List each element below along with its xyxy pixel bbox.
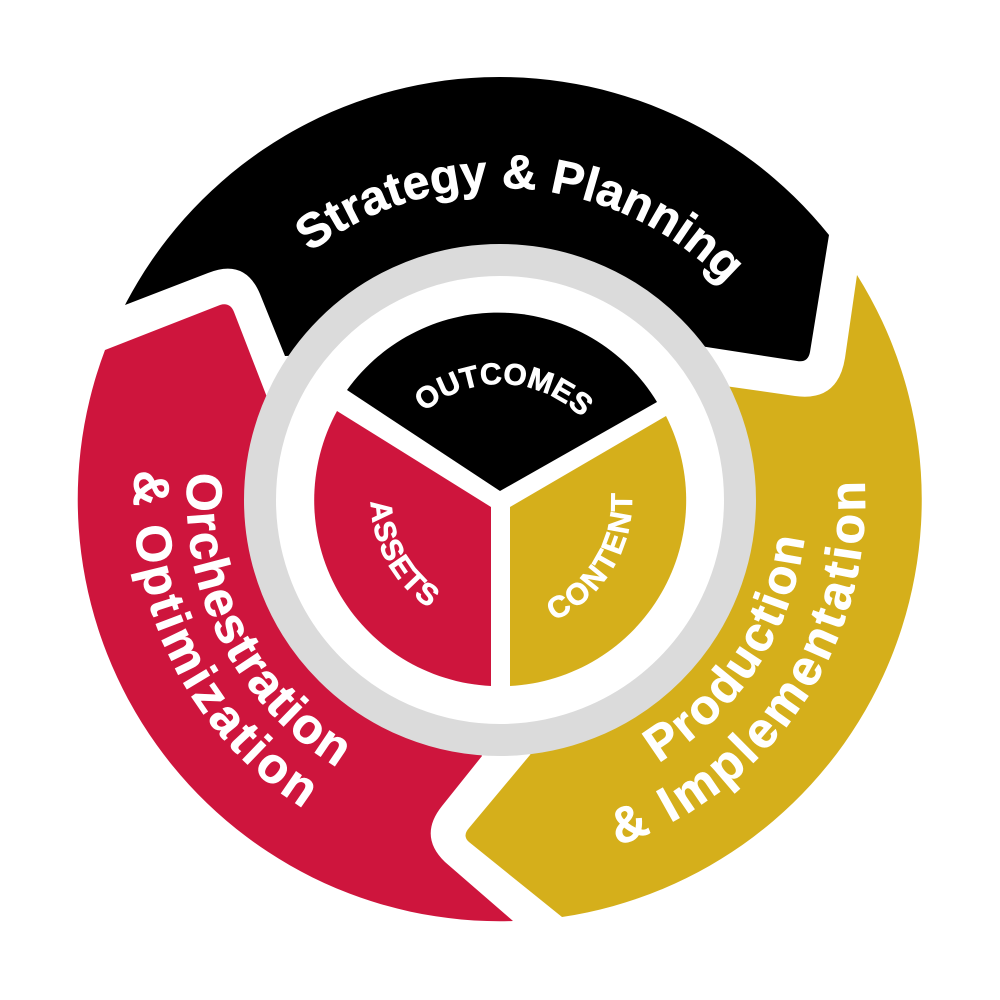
label: Production: Production: [642, 538, 804, 762]
label: OUTCOMES: OUTCOMES: [416, 362, 592, 414]
gray ring: [260, 260, 740, 740]
label: & Optimization: & Optimization: [130, 472, 314, 808]
core: Assets: [314, 411, 491, 686]
segment: Production & Implementation: [466, 275, 922, 917]
label: & Implementation: & Implementation: [615, 484, 866, 843]
core: Content: [510, 416, 686, 686]
label: Strategy & Planning: Strategy & Planning: [296, 155, 742, 286]
label: CONTENT: CONTENT: [548, 493, 632, 618]
label: Orchestration: Orchestration: [186, 474, 347, 766]
segment: Orchestration & Optimization: [78, 304, 513, 922]
core: Outcomes: [347, 312, 657, 491]
segment: Strategy & Planning: [125, 77, 829, 362]
label: ASSETS: ASSETS: [370, 502, 438, 606]
